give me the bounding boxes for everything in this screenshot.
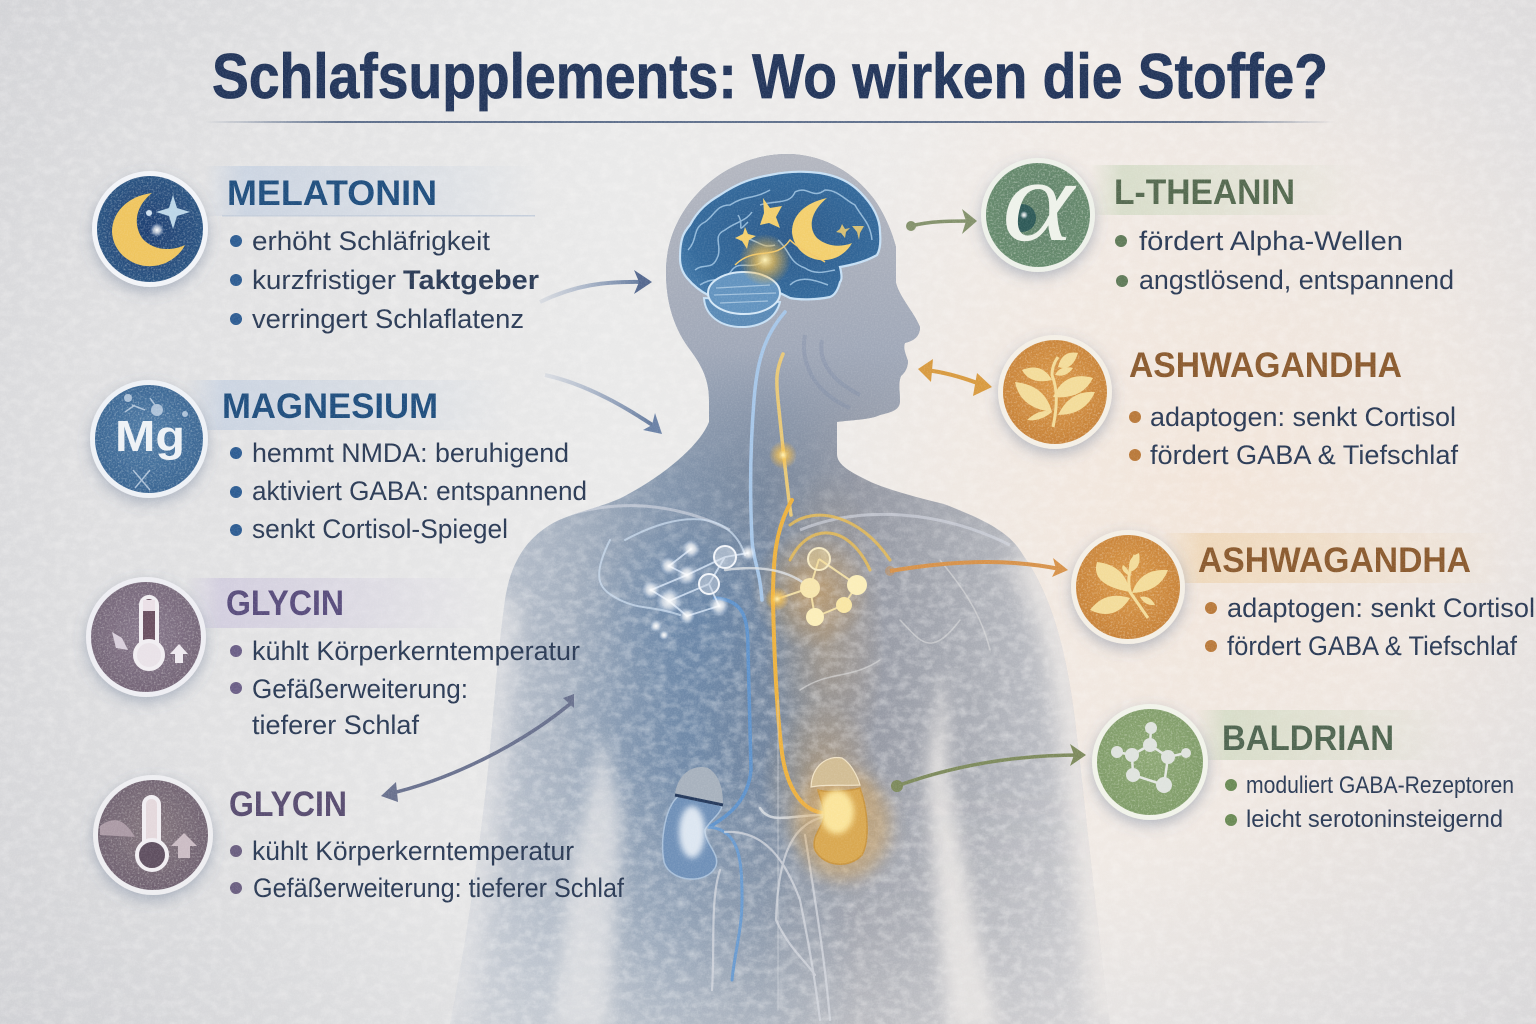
panel: Melatonin: [92, 166, 540, 334]
icon: alpha: [981, 135, 1095, 272]
cerebellum: [704, 272, 780, 327]
bullet list: Gefäßerweiterung: tieferer Schlaf: [253, 873, 624, 903]
kidney blue: [663, 767, 723, 879]
icon: molecule: [1092, 704, 1208, 820]
icon: thermometer: [93, 775, 213, 895]
arrow: Magnesium to neck: [545, 375, 662, 434]
moon in brain: [792, 198, 852, 260]
bullet list: kurzfristiger: [252, 265, 396, 295]
bullet list: hemmt NMDA: beruhigend: [252, 438, 569, 468]
molecule network left: [642, 540, 756, 640]
icon: moon and star: [92, 171, 208, 287]
bullet list: verringert Schlaflatenz: [252, 304, 524, 334]
heading band and heading: MAGNESIUM: [222, 387, 438, 426]
heading band and heading: [1195, 710, 1455, 760]
panel: L-Theanin: [981, 135, 1454, 295]
bullet list: [1205, 593, 1535, 661]
kidney orange: [794, 757, 890, 880]
arrow: L-Theanin: [906, 209, 977, 234]
icon: Mg: Mg: [115, 412, 185, 461]
bullet list: Gefäßerweiterung:: [252, 674, 468, 704]
heading band and heading: ASHWAGANDHA: [1198, 541, 1471, 580]
bullet list: [230, 836, 624, 903]
bullet list: adaptogen: senkt Cortisol: [1227, 593, 1535, 623]
bullet list: kühlt Körperkerntemperatur: [252, 836, 574, 866]
bullet list: leicht serotoninsteigernd: [1246, 806, 1503, 833]
heading: GLYCIN: [229, 785, 347, 824]
bullet list: kühlt Körperkerntemperatur: [252, 636, 580, 666]
heading band and heading: [1160, 533, 1510, 583]
heading: ASHWAGANDHA: [1129, 346, 1402, 385]
panel: Glycin: [86, 577, 580, 740]
bullet list: aktiviert GABA: entspannend: [252, 476, 587, 506]
nerve pathways: [599, 312, 990, 1020]
molecule network right: [765, 548, 867, 626]
heading band and heading: [205, 166, 540, 216]
icon: thermometer: [86, 577, 206, 697]
icon: leaves: [998, 335, 1112, 449]
title: Schlafsupplements: Wo wirken die Stoffe?: [212, 42, 1328, 112]
bullet list: senkt Cortisol-Spiegel: [252, 514, 508, 544]
bullet list: [1129, 402, 1458, 470]
bullet list: erhöht Schläfrigkeit: [252, 226, 491, 256]
panel: Baldrian: [1092, 704, 1514, 833]
heading band and heading: [185, 578, 490, 628]
bullet list: [230, 438, 587, 544]
heading band and heading: [185, 380, 510, 430]
heading band and heading: GLYCIN: [226, 584, 344, 623]
bullet list: adaptogen: senkt Cortisol: [1150, 402, 1456, 432]
bullet list: fördert GABA & Tiefschlaf: [1150, 440, 1458, 470]
bullet list: angstlösend, entspannend: [1139, 265, 1454, 295]
bullet list: fördert GABA & Tiefschlaf: [1227, 631, 1517, 661]
bullet list: [1225, 772, 1514, 833]
heading band and heading: BALDRIAN: [1222, 719, 1394, 758]
heading band and heading: L-THEANIN: [1114, 173, 1295, 212]
icon: leaves: [1071, 530, 1185, 644]
heading band and heading: [1090, 165, 1360, 215]
arrow: Ashwagandha to chest: [885, 558, 1068, 577]
arrow: Ashwagandha double: [918, 359, 992, 396]
bullet list: tieferer Schlaf: [252, 710, 419, 740]
bullet list: [230, 226, 540, 334]
arrow: Glycin to arm: [381, 694, 574, 802]
icon: Mg: [90, 380, 208, 498]
bullet list: fördert Alpha-Wellen: [1139, 226, 1403, 256]
panel: Ashwagandha 2: [1071, 530, 1535, 661]
bullet list: Taktgeber: [403, 265, 540, 295]
arrow: Melatonin to brain: [540, 270, 652, 302]
panel: Glycin 2: [93, 775, 624, 903]
brain: [680, 172, 880, 327]
bullet list: [1115, 226, 1454, 295]
bullet list: [230, 636, 580, 740]
panel: Ashwagandha 1: [998, 335, 1458, 470]
arrow: Baldrian to kidney: [891, 744, 1086, 792]
panel: Magnesium: [90, 380, 587, 544]
human body silhouette: [450, 154, 1110, 1024]
heading band and heading: MELATONIN: [227, 174, 437, 213]
icon: alpha: α: [1002, 135, 1076, 266]
